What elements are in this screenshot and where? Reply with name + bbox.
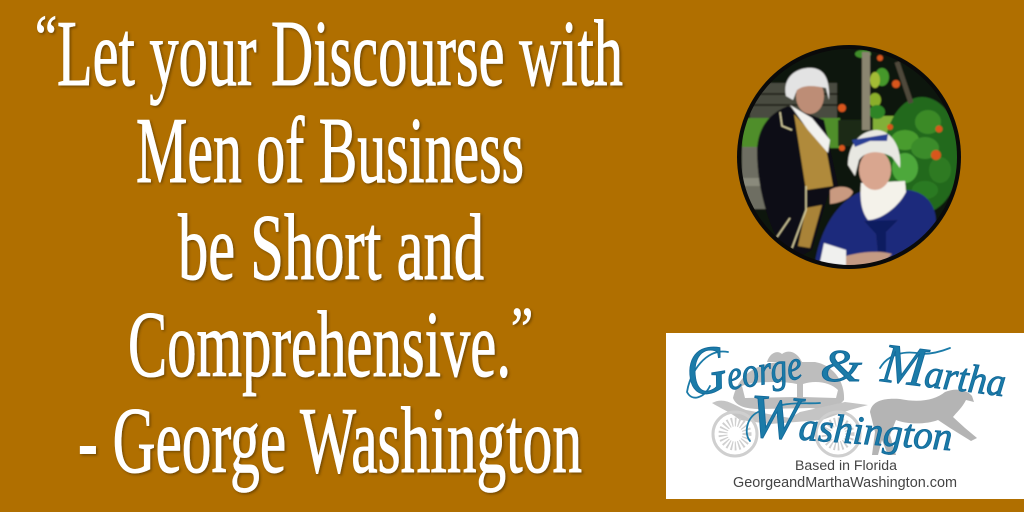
George: hand on shoulder <box>830 187 853 204</box>
carriage silhouette <box>712 352 868 424</box>
quote text: - George Washington <box>78 389 582 493</box>
lawn <box>742 118 840 148</box>
carriage wheels <box>713 412 860 456</box>
Martha: white hair <box>848 130 900 176</box>
George: white wig <box>785 68 829 100</box>
Martha: sleeve cuff and hands <box>820 243 846 266</box>
Martha: face <box>859 150 891 190</box>
quote text: Men of Business <box>136 99 524 203</box>
George: white cravat <box>790 105 830 153</box>
horse silhouette <box>870 390 977 455</box>
George: George <box>680 318 806 411</box>
garden foliage <box>884 97 960 213</box>
wooden trellis post <box>862 52 870 130</box>
ampersand: & <box>820 340 862 391</box>
Martha: bow <box>864 220 898 254</box>
Washington: Washington <box>747 382 955 464</box>
fence <box>742 147 766 209</box>
George: black coat <box>757 106 838 262</box>
quote text: “ <box>35 4 57 72</box>
quote text: be Short and <box>178 196 484 300</box>
logo location text: Based in Florida <box>795 458 898 473</box>
log cabin wall <box>750 83 837 119</box>
circular photo of George and Martha Washington <box>735 44 965 270</box>
logo website text: GeorgeandMarthaWashington.com <box>733 475 957 491</box>
George: face <box>796 78 824 114</box>
Martha: blue ribbon <box>852 134 888 147</box>
quote text <box>35 2 623 493</box>
quote text: ” <box>511 296 533 364</box>
logo script title <box>680 318 1010 464</box>
dark woodland backdrop <box>741 49 952 260</box>
Martha: white collar <box>861 181 906 220</box>
orange flowers <box>838 104 846 112</box>
Martha: blue dress <box>815 190 936 268</box>
George: gold waistcoat <box>794 114 833 190</box>
logo panel <box>666 318 1024 499</box>
George: coat trim <box>777 112 806 248</box>
quote text: Let your Discourse with <box>57 2 623 106</box>
quote text: Comprehensive. <box>128 293 511 397</box>
Martha: Martha <box>877 332 1010 409</box>
